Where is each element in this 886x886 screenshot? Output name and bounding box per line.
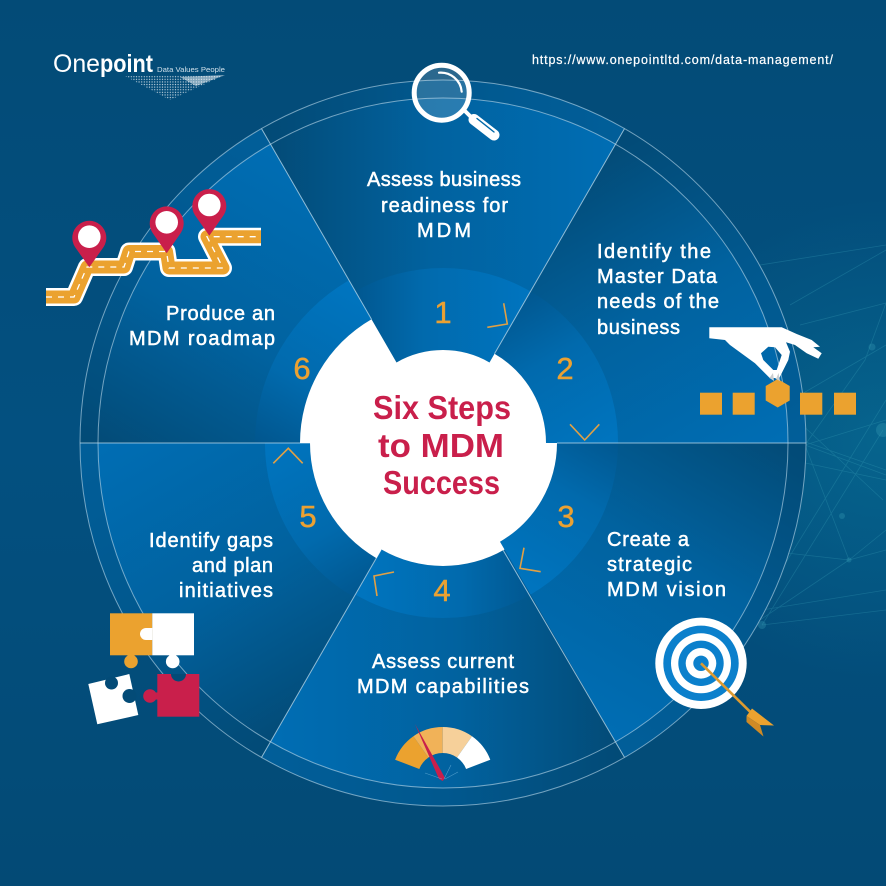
logo: point (100, 50, 154, 78)
network nodes (739, 344, 886, 629)
title: to MDM (378, 427, 504, 464)
step 3 text: strategic (607, 554, 692, 576)
panel: step 3 sector (438, 335, 848, 782)
step 2 text: business (597, 317, 680, 339)
logo: Data Values People (157, 65, 225, 74)
url: https://www.onepointltd.com/data-management/ (532, 53, 834, 67)
icon: magnifying glass (414, 65, 494, 135)
step 6 text (129, 303, 275, 350)
step 6 number: 6 (293, 351, 311, 386)
panel: step 2 sector (429, 104, 848, 556)
title (373, 389, 511, 501)
center white circle (300, 319, 557, 566)
title: Success (383, 464, 500, 501)
logo: One (53, 50, 100, 78)
icon: hand picking hexagon (700, 327, 856, 415)
step 4 chevron (374, 572, 394, 596)
network lines (700, 245, 886, 625)
step 4 number: 4 (433, 573, 451, 608)
step 6 text: MDM roadmap (129, 328, 275, 350)
step 5 text (149, 530, 273, 602)
step 5 text: initiatives (179, 580, 273, 602)
panel: step 5 sector (38, 343, 434, 782)
step 2 text (597, 241, 719, 339)
logo (53, 50, 225, 100)
step 3 text: Create a (607, 529, 690, 551)
step 1 text (367, 169, 521, 242)
step 1 text: Assess business (367, 169, 521, 191)
panel: step 1 sector (262, 80, 624, 362)
step 3 number: 3 (557, 499, 575, 534)
step 4 text: MDM capabilities (357, 676, 529, 698)
icon: puzzle pieces (88, 613, 199, 724)
step 6 text: Produce an (166, 303, 275, 325)
step 4 text (357, 651, 529, 698)
step 1 text: readiness for (381, 195, 508, 217)
step 2 text: needs of the (597, 291, 719, 313)
step 4 text: Assess current (372, 651, 514, 673)
background glow (640, 200, 886, 680)
step 1 number: 1 (434, 295, 452, 330)
step 2 text: Master Data (597, 266, 718, 288)
step 2 text: Identify the (597, 241, 711, 263)
step 1 text: MDM (417, 220, 471, 242)
icon: target with arrow (655, 618, 774, 736)
panel: step 6 sector (38, 104, 427, 538)
panel: step 4 sector (262, 550, 624, 806)
step 3 text (607, 529, 726, 601)
step 5 text: Identify gaps (149, 530, 273, 552)
step 5 chevron (273, 448, 303, 463)
icon: road with map pins (46, 189, 261, 297)
step 2 chevron (570, 424, 599, 440)
step 5 text: and plan (192, 555, 273, 577)
step 2 number: 2 (556, 351, 574, 386)
step 1 chevron (487, 303, 507, 327)
icon: gauge (395, 724, 490, 781)
step 3 text: MDM vision (607, 579, 726, 601)
step 3 chevron (520, 548, 541, 572)
title: Six Steps (373, 389, 511, 426)
step 5 number: 5 (299, 499, 317, 534)
